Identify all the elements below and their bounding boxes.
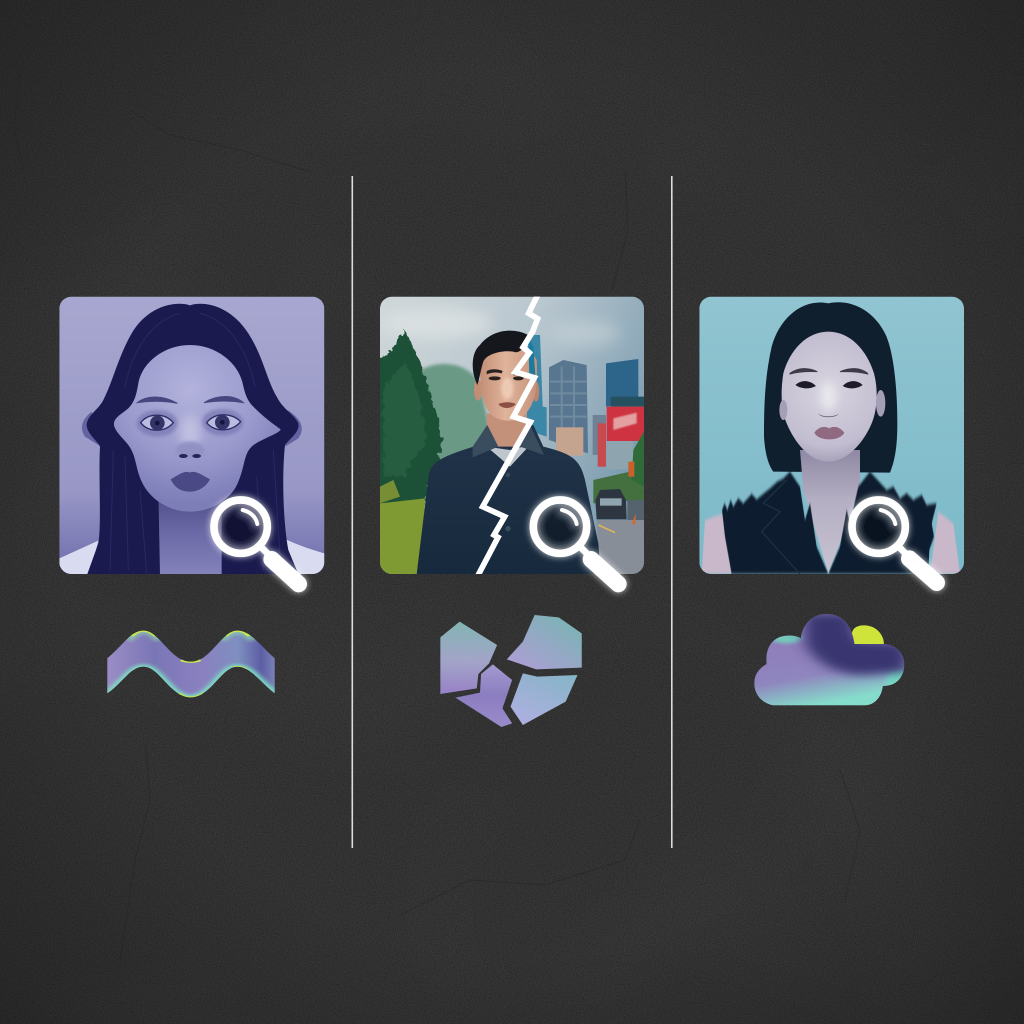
icon: magnifying glass <box>533 500 618 584</box>
icon row coordinates <box>107 613 912 727</box>
panel: fractured portrait (photo with crack) <box>377 295 644 584</box>
icon: magnifying glass <box>852 500 937 583</box>
buildings <box>527 335 547 437</box>
divider line right <box>671 176 673 848</box>
icon: wave <box>107 630 275 698</box>
crack line <box>477 295 538 577</box>
panel: distorted portrait (purple) <box>59 297 324 584</box>
street and car <box>597 520 644 574</box>
trees <box>418 364 490 503</box>
icon: magnifying glass <box>214 500 299 584</box>
panel: blurred portrait (teal) <box>699 297 964 583</box>
divider line left <box>352 176 353 848</box>
man <box>417 425 601 574</box>
icon: broken shards <box>440 615 582 727</box>
icon: sun behind cloud <box>752 613 912 707</box>
